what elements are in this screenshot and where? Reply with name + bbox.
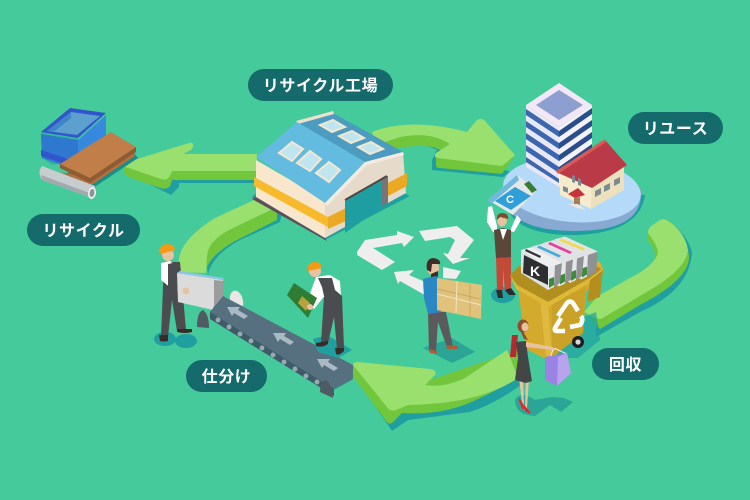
label: リサイクル <box>27 214 140 246</box>
label: リサイクル工場: リサイクル工場 <box>263 77 378 95</box>
cyan cartridge: C <box>506 194 514 206</box>
arrow: sorting to factory <box>178 200 282 275</box>
house <box>556 139 627 210</box>
arrow: collection bin flow <box>584 219 692 337</box>
arrow: factory to reuse buildings <box>372 119 515 177</box>
label: リサイクル工場 <box>248 69 393 101</box>
cyan cartridge <box>532 244 573 286</box>
blue crate <box>41 108 106 170</box>
roof front <box>256 122 365 203</box>
purple bag <box>545 349 571 386</box>
wood boards <box>60 132 138 190</box>
recycling pile <box>40 108 138 200</box>
circuit board <box>287 283 317 318</box>
label: リユース <box>628 112 723 144</box>
bin interior and back rim <box>510 262 603 302</box>
bin body <box>510 268 603 360</box>
worker holding circuit board <box>287 262 352 358</box>
label: 仕分け <box>186 360 267 392</box>
recycling mark <box>555 302 582 331</box>
label: 回収: 回収 <box>609 356 642 374</box>
arrow: collection to sorting <box>352 350 530 431</box>
recycling bin with ink cartridges <box>510 236 603 360</box>
office tower <box>526 83 592 187</box>
arrow: factory to recycling materials <box>124 143 260 195</box>
man lifting ink cartridge <box>487 175 537 303</box>
center recycling symbol <box>357 226 474 298</box>
magenta cartridge <box>543 240 584 283</box>
label: 回収 <box>592 348 659 380</box>
roof ridge cap <box>296 111 334 124</box>
black cartridge: K <box>530 263 540 279</box>
cardboard parcel <box>437 278 482 319</box>
rear wheel <box>572 336 584 348</box>
label: リサイクル: リサイクル <box>42 222 125 240</box>
conveyor belt <box>197 291 353 398</box>
roof windows <box>279 120 383 182</box>
roof rear <box>297 113 403 162</box>
woman with shopping bag <box>510 320 573 416</box>
worker carrying cartridge <box>154 244 224 348</box>
factory building <box>252 111 410 241</box>
metal pipe <box>40 166 97 200</box>
label: 仕分け: 仕分け <box>202 368 251 386</box>
label: リユース: リユース <box>643 121 708 138</box>
reuse platform with buildings <box>500 83 645 235</box>
yellow cartridge <box>554 236 598 280</box>
belt arrows <box>227 307 338 371</box>
man carrying box <box>423 258 482 363</box>
